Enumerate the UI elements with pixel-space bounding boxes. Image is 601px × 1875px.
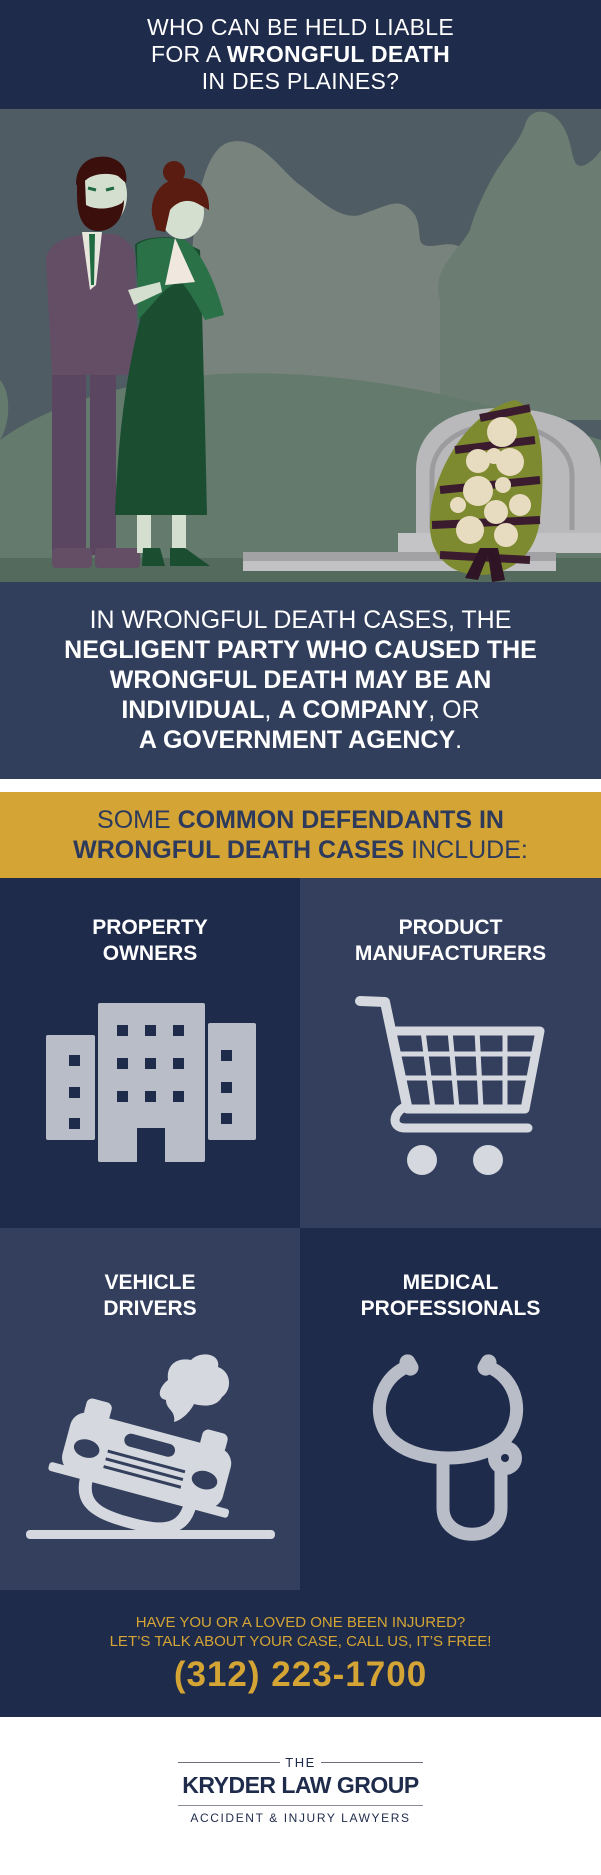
- footer logo: [178, 1755, 423, 1825]
- label: [355, 916, 546, 965]
- title text: FOR A WRONGFUL DEATH: [151, 41, 450, 67]
- statement text: INDIVIDUAL, A COMPANY, OR: [121, 696, 480, 724]
- banner text: WRONGFUL DEATH CASES INCLUDE:: [73, 836, 528, 864]
- label: [361, 1271, 540, 1320]
- label: MANUFACTURERS: [355, 942, 546, 965]
- label: [103, 1271, 197, 1320]
- label: PRODUCT: [399, 916, 502, 939]
- phone number: (312) 223-1700: [174, 1655, 427, 1694]
- CTA text: HAVE YOU OR A LOVED ONE BEEN INJURED?: [136, 1614, 465, 1631]
- logo: tagline: ACCIDENT & INJURY LAWYERS: [190, 1811, 411, 1825]
- icon: stethoscope: [372, 1354, 524, 1541]
- banner text: [73, 806, 528, 864]
- header: title: [0, 0, 601, 109]
- statement text: IN WRONGFUL DEATH CASES, THE: [90, 606, 511, 634]
- label: OWNERS: [103, 942, 197, 965]
- icon: buildings: [46, 1003, 256, 1162]
- panel: product manufacturers: [300, 878, 601, 1228]
- title text: [147, 14, 454, 94]
- call to action: [0, 1590, 601, 1717]
- statement text: WRONGFUL DEATH MAY BE AN: [110, 666, 491, 694]
- statement text: A GOVERNMENT AGENCY.: [139, 726, 462, 754]
- label: PROPERTY: [92, 916, 208, 939]
- CTA text: [110, 1614, 491, 1650]
- hill: [0, 373, 601, 582]
- label: PROFESSIONALS: [361, 1297, 540, 1320]
- label: VEHICLE: [104, 1271, 196, 1294]
- bushes: [190, 141, 470, 420]
- gravestone: [243, 408, 601, 571]
- icon: overturned car: [26, 1354, 275, 1539]
- logo: firm name: KRYDER LAW GROUP: [182, 1772, 419, 1798]
- wreath: [430, 400, 542, 582]
- statement text: [64, 606, 537, 754]
- illustration: mourners at grave: [0, 109, 601, 582]
- icon: shopping cart: [355, 996, 544, 1175]
- panel: vehicle drivers: [0, 1228, 300, 1590]
- man: [46, 157, 140, 568]
- gold banner: common defendants heading: [0, 792, 601, 878]
- panel: property owners: [0, 878, 300, 1228]
- woman: [115, 161, 224, 566]
- label: MEDICAL: [403, 1271, 498, 1294]
- title text: IN DES PLAINES?: [202, 68, 399, 94]
- banner text: SOME COMMON DEFENDANTS IN: [97, 806, 504, 834]
- label: [92, 916, 208, 965]
- label: DRIVERS: [103, 1297, 197, 1320]
- panel: medical professionals: [300, 1228, 601, 1590]
- title text: WHO CAN BE HELD LIABLE: [147, 14, 454, 40]
- statement text: NEGLIGENT PARTY WHO CAUSED THE: [64, 636, 537, 664]
- logo: THE: THE: [285, 1755, 316, 1770]
- CTA text: LET’S TALK ABOUT YOUR CASE, CALL US, IT’S FREE!: [110, 1633, 491, 1650]
- intro statement panel: [0, 582, 601, 779]
